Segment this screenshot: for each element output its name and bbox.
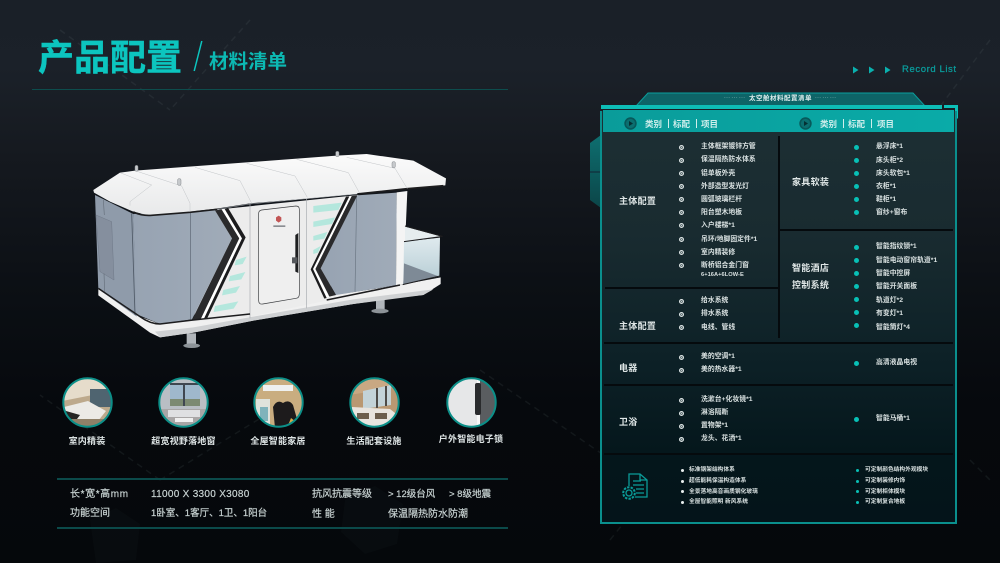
list: smart control items: 智能中控屏 [876, 270, 910, 277]
list: main configuration items: 圆弧玻璃栏杆 [701, 196, 742, 203]
icon: document gear [622, 473, 648, 500]
circle photo: smart room [253, 377, 304, 428]
list: smart control items [854, 242, 938, 331]
list: furniture items: 床头软包*1 [876, 170, 910, 177]
table column headers [624, 117, 894, 130]
category labels [619, 196, 656, 427]
list: water and electric: 排水系统 [701, 310, 728, 317]
table column headers: 项目 [877, 119, 894, 129]
list: main configuration items: 断桥铝合金门窗 [701, 262, 749, 269]
list: smart toilet: 智能马桶*1 [876, 415, 910, 422]
product illustration: capsule house [93, 151, 446, 348]
door [250, 197, 307, 318]
list: appliances: 美的空调*1 [701, 353, 735, 360]
legs [183, 300, 389, 348]
list: standard features: 全景落地高音画质钢化玻璃 [689, 489, 758, 495]
list: standard features: 标准钢架结构体系 [689, 467, 735, 473]
specifications table: 性 能 [312, 509, 335, 520]
specifications table: 长*宽*高mm [70, 489, 129, 500]
list: customizable features: 可定制复合地板 [865, 499, 905, 505]
list: furniture items: 衣柜*1 [876, 183, 896, 190]
specifications table: > 12级台风 [388, 489, 435, 500]
feature: interior fit-out: 室内精装 [69, 436, 105, 446]
circle photo: bedroom [62, 377, 113, 428]
specifications table: 功能空间 [70, 508, 110, 519]
list: furniture items: 床头柜*2 [876, 157, 903, 164]
specifications table: 抗风抗震等级 [312, 489, 372, 500]
side tab [590, 136, 600, 208]
circle photo: window [158, 377, 209, 428]
list: bathroom: 淋浴隔断 [701, 409, 728, 416]
header tab with title: ⋯⋯⋯ 太空舱材料配置清单 ⋯⋯⋯ [724, 95, 837, 102]
category labels: 电器 [619, 363, 638, 373]
list: television: 高清液晶电视 [876, 359, 917, 366]
list: main configuration items: 铝单板外壳 [701, 170, 735, 177]
list: television [854, 358, 917, 366]
list: smart control items: 智能电动窗帘轨道*1 [876, 257, 937, 264]
specifications table: > 8级地震 [449, 489, 491, 500]
list: customizable features: 可定制颜色结构外观模块 [865, 467, 928, 473]
list: customizable features [856, 466, 928, 505]
list: main configuration items: 吊环/地脚固定件*1 [701, 236, 757, 243]
list: smart toilet [854, 414, 910, 422]
feature: smart home [250, 377, 306, 446]
column and balcony [396, 191, 407, 286]
feature: living facilities [346, 377, 402, 446]
table body [600, 111, 957, 524]
feature: smart lock [439, 377, 503, 444]
table column headers: 标配 [673, 119, 690, 129]
header band [603, 110, 954, 132]
feature: smart lock: 户外智能电子锁 [439, 434, 503, 444]
list: customizable features: 可定制柜体模块 [865, 489, 905, 495]
list: furniture items: 鞋柜*1 [876, 196, 896, 203]
category labels: 主体配置 [619, 196, 656, 206]
category labels: 主体配置 [619, 321, 656, 331]
specifications table: 1卧室、1客厅、1卫、1阳台 [151, 508, 267, 519]
right category labels: 智能酒店 [792, 263, 829, 273]
circle photo: door lock [446, 377, 497, 428]
play icon right [799, 117, 812, 130]
header tab with title [636, 92, 925, 105]
table column headers: 类别 [820, 119, 837, 129]
list: standard features: 全屋智能照明 新风系统 [689, 499, 748, 505]
specifications table: 保温隔热防水防潮 [388, 509, 468, 520]
feature: smart home: 全屋智能家居 [250, 436, 306, 446]
list: water and electric: 电线、管线 [701, 324, 735, 331]
right chevron [311, 195, 357, 299]
circle photo: washroom [349, 377, 400, 428]
list: standard features [681, 466, 758, 505]
list: smart control items: 轨道灯*2 [876, 297, 903, 304]
title: 产品配置: 产品配置 [38, 37, 182, 78]
list: customizable features: 可定制装修内饰 [865, 478, 905, 484]
record list tag [853, 64, 957, 75]
category labels: 卫浴 [619, 417, 638, 427]
list: bathroom: 洗漱台+化妆镜*1 [701, 396, 753, 403]
vents [214, 203, 342, 312]
specifications table: 11000 X 3300 X3080 [151, 489, 250, 500]
list: smart control items: 智能筒灯*4 [876, 324, 910, 331]
slash divider [194, 40, 202, 72]
feature: panoramic window: 超宽视野落地窗 [151, 436, 216, 446]
list: appliances [679, 352, 742, 373]
list: bathroom [679, 394, 753, 442]
list: main configuration items: 保温隔热防水体系 [701, 156, 756, 163]
list: main configuration items: 外部造型发光灯 [701, 183, 749, 190]
base [98, 277, 441, 337]
list: furniture items: 窗纱+窗布 [876, 209, 907, 216]
right category labels: 家具软装 [792, 177, 829, 187]
panel: materials list [590, 92, 958, 524]
corner bracket [944, 105, 958, 118]
list: water and electric: 给水系统 [701, 297, 728, 304]
lifting hooks [135, 151, 395, 185]
list: appliances: 美的热水器*1 [701, 366, 742, 373]
table column headers: 标配 [848, 119, 865, 129]
list: bathroom: 龙头、花洒*1 [701, 435, 742, 442]
list: smart control items: 有变灯*1 [876, 310, 903, 317]
list: main configuration items [679, 142, 758, 278]
list: furniture items [854, 142, 910, 216]
list: standard features: 超低能耗保温构造体系 [689, 478, 746, 484]
feature: interior fit-out [62, 377, 113, 446]
feature: living facilities: 生活配套设施 [346, 436, 402, 446]
list: main configuration items: 室内精装修 [701, 249, 735, 256]
subtitle: 材料清单: 材料清单 [209, 51, 287, 73]
play icon left [624, 117, 637, 130]
gray left panel [133, 210, 232, 324]
table column headers: 类别 [645, 119, 662, 129]
list: water and electric [679, 296, 735, 331]
left chevron [192, 208, 246, 320]
list: bathroom: 置物架*1 [701, 422, 728, 429]
list: main configuration items: 主体框架镀锌方管 [701, 143, 756, 150]
feature: panoramic window [151, 377, 216, 446]
list: smart control items: 智能指纹锁*1 [876, 243, 917, 250]
roof [93, 154, 446, 216]
right category labels: 控制系统 [792, 280, 829, 290]
list: furniture items: 悬浮床*1 [876, 143, 903, 150]
right category labels [792, 177, 829, 290]
table column headers: 项目 [701, 119, 718, 129]
list: main configuration items: 入户楼梯*1 [701, 222, 735, 229]
lower trim line [98, 285, 400, 324]
list: main configuration items: 6+16A+6LOW-E [701, 272, 744, 278]
record list tag: Record List [902, 64, 957, 75]
specifications table [57, 478, 508, 529]
list: smart control items: 智能开关面板 [876, 283, 917, 290]
front white body [193, 195, 358, 322]
list: main configuration items: 阳台塑木地板 [701, 209, 742, 216]
side body [95, 195, 137, 317]
gray right panel [321, 193, 397, 295]
